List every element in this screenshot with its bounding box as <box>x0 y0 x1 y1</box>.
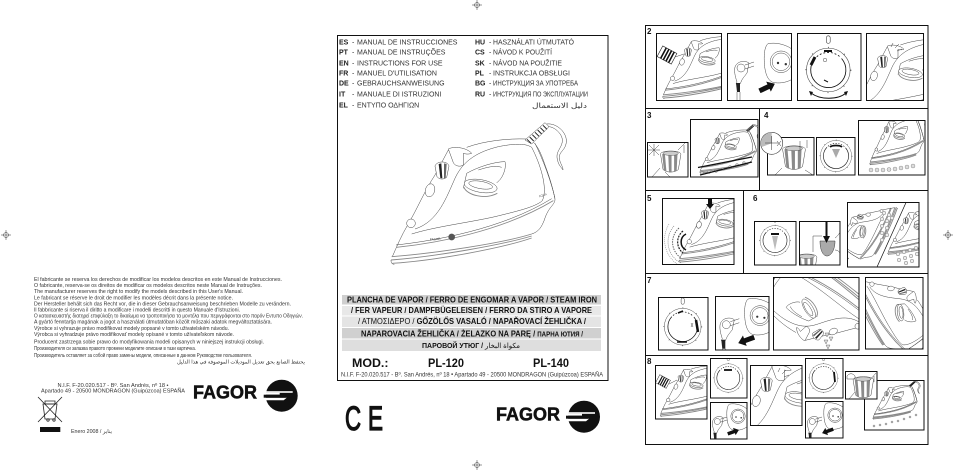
language list: - <box>352 60 355 68</box>
language list: - <box>352 92 355 98</box>
language list: ИНСТРУКЦИЯ ЗА УПОТРЕБА <box>493 80 578 88</box>
text block: legal notices: Le fabricant se réserve le droit de modifier les modèles décrit dans la présente notice. <box>34 295 233 301</box>
icon: crossed-out waste bin <box>38 397 62 422</box>
product name bands: / ΑΤΜΟΣΙΔΕΡΟ / GŐZÖLŐS VASALÓ / NAPAŘOVACÍ ŽEHLIČKA / <box>358 315 587 326</box>
step 2 panel a <box>656 28 750 100</box>
logo: Fagor front cover <box>496 401 600 433</box>
language list: CS <box>475 50 485 56</box>
step 7 panel c <box>740 232 887 381</box>
language list: PL <box>475 70 485 78</box>
step 8 panel f <box>806 402 845 450</box>
step numbers <box>647 27 769 366</box>
step numbers: 3 <box>647 111 652 120</box>
front cover frame <box>338 36 608 380</box>
model numbers <box>352 356 569 370</box>
product name bands <box>342 294 601 351</box>
step 8 panel h <box>864 380 924 430</box>
language list: - <box>489 80 492 88</box>
step 2 panel d <box>846 27 954 129</box>
step numbers: 7 <box>647 276 652 285</box>
language list: FR <box>339 70 348 78</box>
text block: legal notices: El fabricante se reserva los derechos de modificar los modelos descritos en este Manual de Instrucciones. <box>34 277 282 283</box>
text block: legal notices <box>34 277 306 365</box>
text block: legal notices: Ο κατασκευαστής διατηρεί επιφύλαξη το δικαίωμα να τροποποιήσει τα μοντέλα που περιγράφονται στο παρόν Εντυπο Οδηγιών. <box>34 312 303 319</box>
black bar <box>40 427 60 432</box>
step 4 temperature magnifier <box>761 132 783 154</box>
language list: - <box>352 50 355 56</box>
step 8 panel g <box>846 372 877 399</box>
language list: - <box>352 70 355 78</box>
logo: Fagor back cover <box>193 380 298 412</box>
step numbers: 4 <box>764 111 769 120</box>
step 2 panel c <box>798 34 861 100</box>
product name bands: PLANCHA DE VAPOR / FERRO DE ENGOMAR A VAPOR / STEAM IRON <box>347 294 597 304</box>
text block: legal notices: Der Hersteller behält sich das Recht vor, die in dieser Gebrauchsanweisung beschrieben Modelle zu verändern. <box>34 301 291 307</box>
main iron illustration <box>391 123 566 264</box>
logo: Fagor front cover: FAGOR <box>496 404 560 424</box>
main iron illustration: FAGOR <box>430 237 441 242</box>
step 5 panel <box>662 190 769 264</box>
step 4 panel b <box>816 132 855 175</box>
steps frame and dividers <box>646 26 928 444</box>
language list: - <box>489 70 492 78</box>
step 4 panel c <box>858 112 928 175</box>
panel: instruction steps <box>645 25 928 445</box>
language list: MANUALE DI ISTRUZIONI <box>357 92 441 98</box>
language list <box>339 38 588 110</box>
language list: - <box>489 50 492 56</box>
step 8 panel e <box>806 356 843 398</box>
language list: NÁVOD NA POUŽITIE <box>493 58 562 68</box>
language list: - <box>352 80 355 88</box>
text block: address: Apartado 49 - 20500 MONDRAGON (Guipúzcoa) ESPAÑA <box>41 388 186 395</box>
language list: SK <box>475 60 485 68</box>
step 7 panel b <box>716 296 774 363</box>
language list: INSTRUCTIONS FOR USE <box>357 60 443 68</box>
step 6 panel c <box>847 202 920 268</box>
text block: legal notices: O fabricante, reserva-se os direitos de modificar os modelos descritos neste Manual de Instruções. <box>34 283 262 289</box>
step 6 panel b <box>796 222 841 275</box>
main iron illustration: AQUA <box>538 192 547 198</box>
language list: دليل الاستعمال <box>532 103 587 110</box>
language list: EN <box>339 60 349 68</box>
language list: PT <box>339 50 349 56</box>
text block: address: N.I.F. F-20.020.517 - Bº. San Andrés, nº 18 • <box>58 383 169 389</box>
text block: legal notices: Výrobca si vyhradzuje právo modifikovať modely opísané v tomto užívateľskom návode. <box>34 332 234 338</box>
product name bands: / FER VAPEUR / DAMPFBÜGELEISEN / FERRO DA STIRO A VAPORE <box>351 305 592 315</box>
language list: ИНСТРУКЦИЯ ПО ЭКСПЛУАТАЦИИ <box>493 92 588 98</box>
step 6 panel a <box>754 217 796 265</box>
language list: DE <box>339 80 349 88</box>
language list: - <box>352 102 355 110</box>
step 8 panel d <box>724 344 871 463</box>
text: date: Enero 2008 / يناير <box>71 429 113 435</box>
step numbers: 2 <box>647 27 652 36</box>
language list: - <box>489 40 492 46</box>
panel: back cover <box>34 277 306 435</box>
step numbers: 8 <box>647 357 652 366</box>
step 7 panel a <box>658 298 708 350</box>
language list: RU <box>475 92 485 98</box>
language list: - <box>352 40 355 46</box>
model numbers: PL-120 <box>428 356 464 370</box>
language list: BG <box>475 80 486 88</box>
logo: Fagor back cover: FAGOR <box>193 382 257 402</box>
language list: HASZNÁLATI ÚTMUTATÓ <box>493 38 575 46</box>
model numbers: MOD.: <box>352 356 388 370</box>
language list: INSTRUKCJA OBSŁUGI <box>493 70 570 78</box>
step numbers: 6 <box>753 194 758 203</box>
language list: HU <box>475 40 485 46</box>
CE mark: E <box>368 400 383 438</box>
language list: MANUAL DE INSTRUÇÕES <box>357 48 446 56</box>
step 7 panel d <box>849 259 944 366</box>
CE mark <box>345 400 383 438</box>
text block: legal notices: Výrobce si vyhrazuje právo modifikovat modely popsané v tomto uživatelském návodu. <box>34 326 229 332</box>
language list: MANUAL DE INSTRUCCIONES <box>357 40 458 46</box>
step numbers: 5 <box>647 194 652 203</box>
step 8 panel b <box>710 356 747 398</box>
step 2 panel b <box>728 34 797 106</box>
language list: ΕΝΤΥΠΟ ΟΔΗΓΙΩΝ <box>357 102 419 110</box>
step 8 panel a <box>656 359 731 419</box>
address line: N.I.F. F-20.020.517 - Bº. San Andrés, nº 18 • Apartado 49 - 20500 MONDRAGON (Guipúzcoa) ESPAÑA <box>341 371 603 378</box>
step 3 panel b <box>690 120 760 177</box>
text block: legal notices: Производитель оставляет за собой право замены модели, описанные в данном Руководстве пользователя. <box>34 352 252 359</box>
language list: - <box>489 60 492 68</box>
step 3 panel a <box>648 141 688 177</box>
language list: NÁVOD K POUŽITÍ <box>493 48 552 56</box>
product name bands: NAPAROVACIA ŽEHLIČKA / ŻELAZKO NA PARĘ / ПАРНА ЮТИЯ / <box>361 327 583 338</box>
text block: legal notices: Il fabbricante si riserva il diritto a modificare i modelli descritti in questo Manuale d'Istruzioni. <box>34 308 240 314</box>
product name bands: ПАРОВОЙ УТЮГ / مكواة البخار <box>422 341 520 350</box>
step 4 panel a <box>768 138 814 175</box>
text block: legal notices: يحتفظ الصانع بحق تعديل الموديلات الموصوفة في هذا الدليل <box>177 359 306 365</box>
language list: MANUEL D'UTILISATION <box>357 70 437 78</box>
text block: legal notices: The manufacturer reserves the right to modify the models described in this User's Manual. <box>34 289 243 295</box>
language list: EL <box>339 102 349 110</box>
panel: front cover <box>338 36 608 380</box>
language list: IT <box>339 92 346 98</box>
step 8 panel c <box>710 402 748 450</box>
CE mark: C <box>345 400 361 438</box>
text block: legal notices: A gyártó fenntartja magának a jogot a használati útmutatóban közölt műszaki adatok megváltoztatására. <box>34 320 272 326</box>
language list: ES <box>339 40 349 46</box>
model numbers: PL-140 <box>533 356 569 370</box>
language list: - <box>489 92 492 98</box>
text block: legal notices: Producent zastrzega sobie prawo do modyfikowania modeli opisanych w niniejszej instrukcji obsługi. <box>34 340 264 346</box>
text block: legal notices: Производителя си запазва правото промени моделите описани в тази картичка. <box>34 346 196 352</box>
text block: address <box>41 383 186 395</box>
language list: GEBRAUCHSANWEISUNG <box>357 80 445 88</box>
